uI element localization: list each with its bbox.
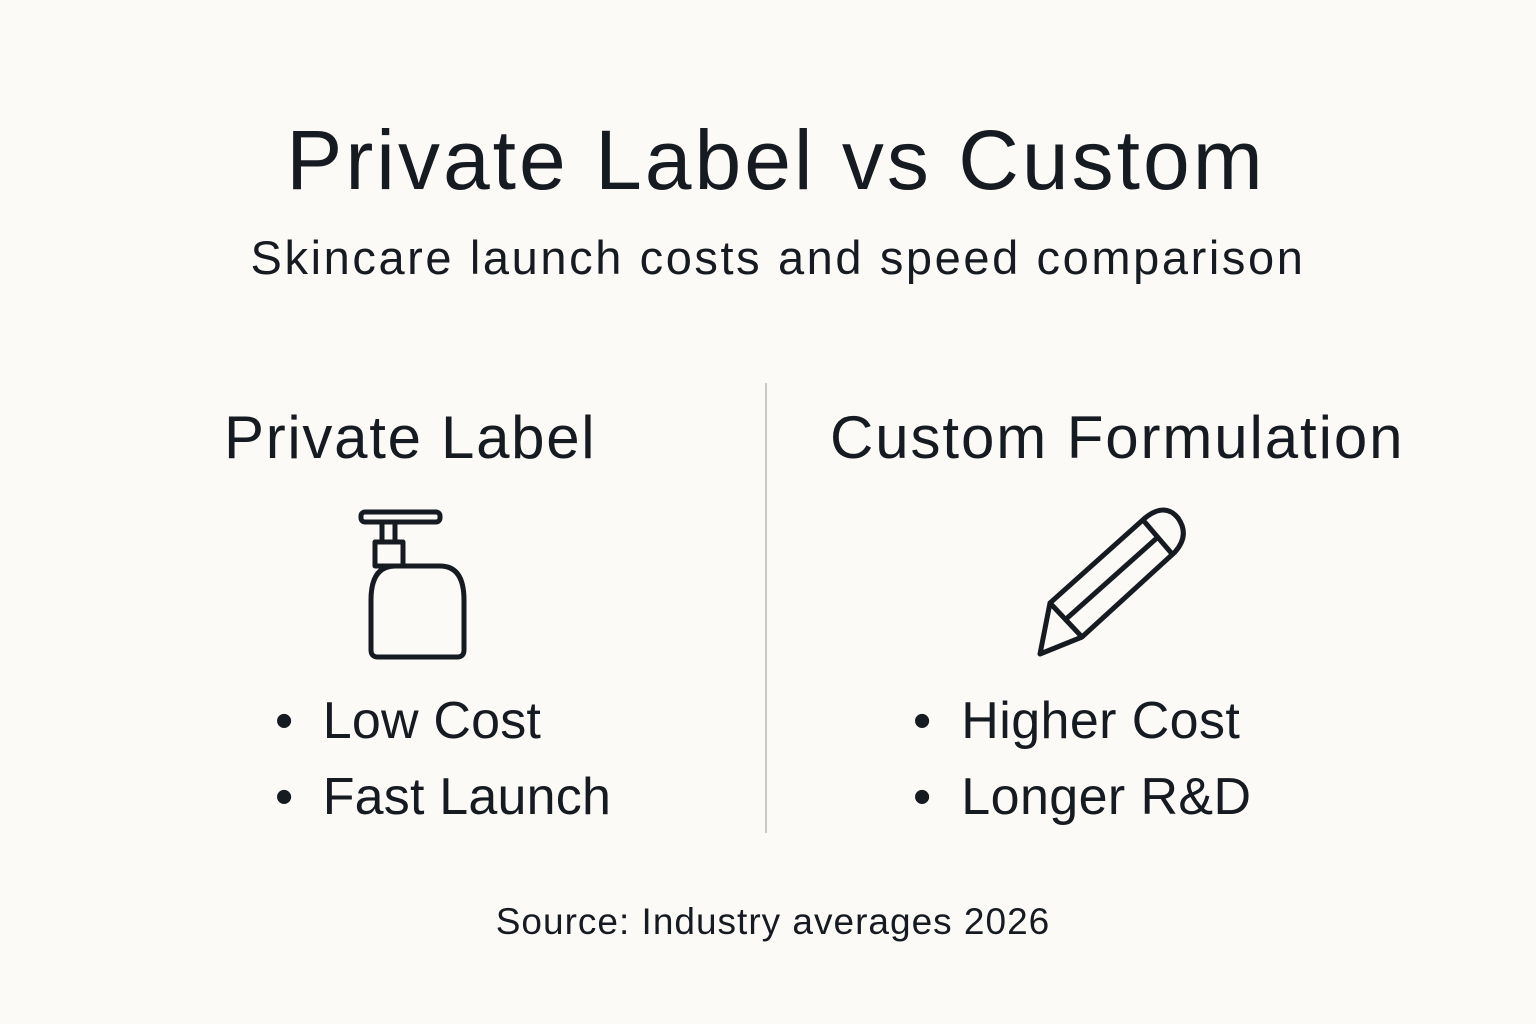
icon: pencil [1038,508,1186,656]
panel: private label [224,404,611,826]
bullet list [275,692,611,826]
icon: pump bottle [358,510,466,660]
bullet list: • Low Cost [275,692,541,750]
bullet list [913,692,1251,826]
divider [765,383,767,833]
heading: custom formulation: Custom Formulation [830,404,1404,471]
subtitle: Skincare launch costs and speed comparison [251,231,1305,284]
heading: private label: Private Label [224,404,596,471]
bullet list: • Fast Launch [275,768,611,826]
panel: custom formulation [830,404,1404,826]
bullet list: • Longer R&D [913,768,1251,826]
title: Private Label vs Custom [286,113,1266,207]
source note: Source: Industry averages 2026 [496,901,1050,942]
bullet list: • Higher Cost [913,692,1240,750]
